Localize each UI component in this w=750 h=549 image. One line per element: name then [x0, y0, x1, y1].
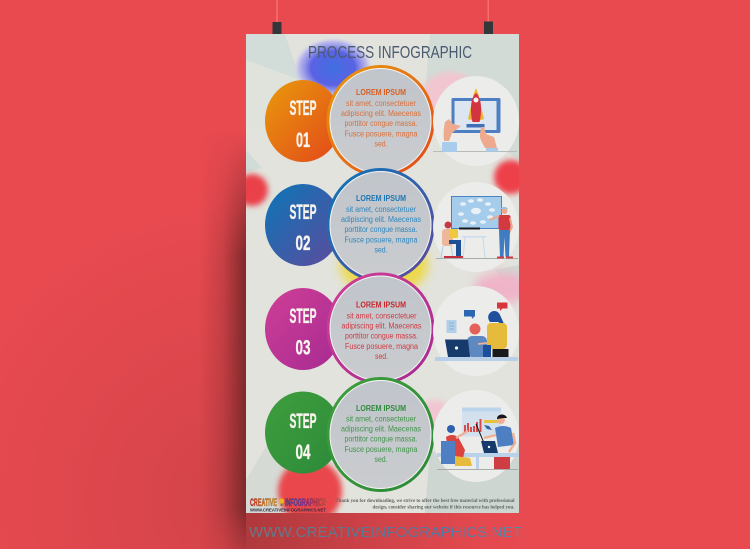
blob: red bottom — [278, 459, 342, 523]
step 4 text circle: sed. — [374, 455, 388, 464]
poster background — [246, 34, 519, 513]
step 2 text circle: Fusce posuere, magna — [344, 236, 418, 244]
hanging string left — [276, 0, 278, 23]
step 2 text circle: porttitor congue massa. — [344, 225, 418, 234]
footer note: design, consider sharing our website if this resource has helped you. — [372, 506, 515, 510]
background facets — [246, 34, 519, 513]
step 3 badge — [265, 288, 341, 370]
blob: pink bottom — [425, 398, 446, 426]
step 3 badge: 03 — [296, 336, 310, 360]
step 1 text circle: porttitor congue massa. — [344, 119, 418, 128]
website url: WWW.CREATIVEINFOGRAPHICS.NET — [249, 524, 522, 541]
step 4 — [265, 378, 519, 490]
step 1 text circle: sit amet, consectetuer — [346, 99, 416, 108]
step 2 — [265, 170, 519, 280]
step 2 text circle — [328, 170, 433, 280]
poster clip left — [272, 22, 282, 39]
hanging string right — [488, 0, 489, 23]
step 1 text circle: sed. — [374, 140, 388, 148]
step 4 text circle: Fusce posuere, magna — [344, 445, 418, 454]
step 2 text circle: LOREM IPSUM — [356, 194, 406, 203]
step 3 text circle — [328, 274, 433, 383]
mockup scene — [50, 0, 522, 549]
blob: yellow — [333, 248, 435, 291]
step 3 text circle: Fusce posuere, magna — [345, 342, 418, 351]
blob: pink top right — [423, 70, 468, 112]
step 3 text circle: porttitor congue massa. — [345, 332, 418, 340]
step 2 badge — [265, 184, 341, 266]
step 3 text circle: LOREM IPSUM — [356, 300, 406, 310]
mockup scene: INFOGRAPHICS — [285, 497, 326, 509]
step 1 — [265, 66, 519, 176]
step 4 text circle: porttitor congue massa. — [344, 434, 418, 444]
step 4 text circle: adipiscing elit. Maecenas — [341, 424, 421, 434]
step 1 text circle: adipiscing elit. Maecenas — [341, 109, 421, 118]
step 3 text circle: sed. — [375, 352, 388, 361]
step 3 — [265, 274, 519, 383]
footer logo — [250, 497, 326, 513]
step 4 badge — [265, 392, 341, 474]
blob: red right — [494, 160, 528, 194]
footer logo: CREATIVE — [250, 497, 277, 509]
step 3 badge: STEP — [290, 305, 316, 328]
step 4 text circle — [328, 378, 433, 490]
step 1 text circle: Fusce posuere, magna — [344, 130, 418, 138]
title: PROCESS INFOGRAPHIC — [308, 42, 472, 62]
illustration: team reviewing a chart — [433, 390, 519, 482]
poster — [236, 34, 530, 523]
step 4 text circle: sit amet, consectetuer — [346, 414, 416, 424]
poster shadow — [50, 140, 470, 549]
step 1 text circle — [328, 66, 433, 176]
blob: pink right — [474, 272, 530, 304]
step 2 text circle: adipiscing elit. Maecenas — [341, 215, 421, 224]
illustration: rocket launching from a tablet — [433, 76, 519, 166]
step 1 badge — [265, 80, 341, 162]
step 2 text circle: sed. — [374, 246, 388, 254]
step 1 text circle: LOREM IPSUM — [356, 88, 406, 97]
step 4 text circle: LOREM IPSUM — [356, 404, 406, 413]
step 1 badge: STEP — [290, 97, 316, 120]
step 2 text circle: sit amet, consectetuer — [346, 205, 416, 214]
step 2 badge: STEP — [290, 201, 316, 224]
step 4 badge: STEP — [290, 410, 316, 433]
step 3 text circle: sit amet, consectetuer — [346, 312, 417, 320]
blob: blue — [296, 39, 370, 95]
illustration: presenter at a mind-map board — [433, 182, 519, 272]
step 4 badge: 04 — [296, 441, 311, 464]
step 1 badge: 01 — [296, 129, 310, 152]
footer note — [336, 499, 515, 510]
step 2 badge: 02 — [296, 232, 310, 255]
blob: red left — [236, 174, 268, 206]
poster clip right — [484, 22, 493, 38]
step 3 text circle: adipiscing elit. Maecenas — [342, 322, 422, 330]
footer logo: WWW.CREATIVEINFOGRAPHICS.NET — [250, 507, 326, 513]
illustration: colleagues at a laptop — [433, 286, 519, 376]
footer note: Thank you for downloading, we strive to offer the best free material with professional — [336, 499, 515, 504]
